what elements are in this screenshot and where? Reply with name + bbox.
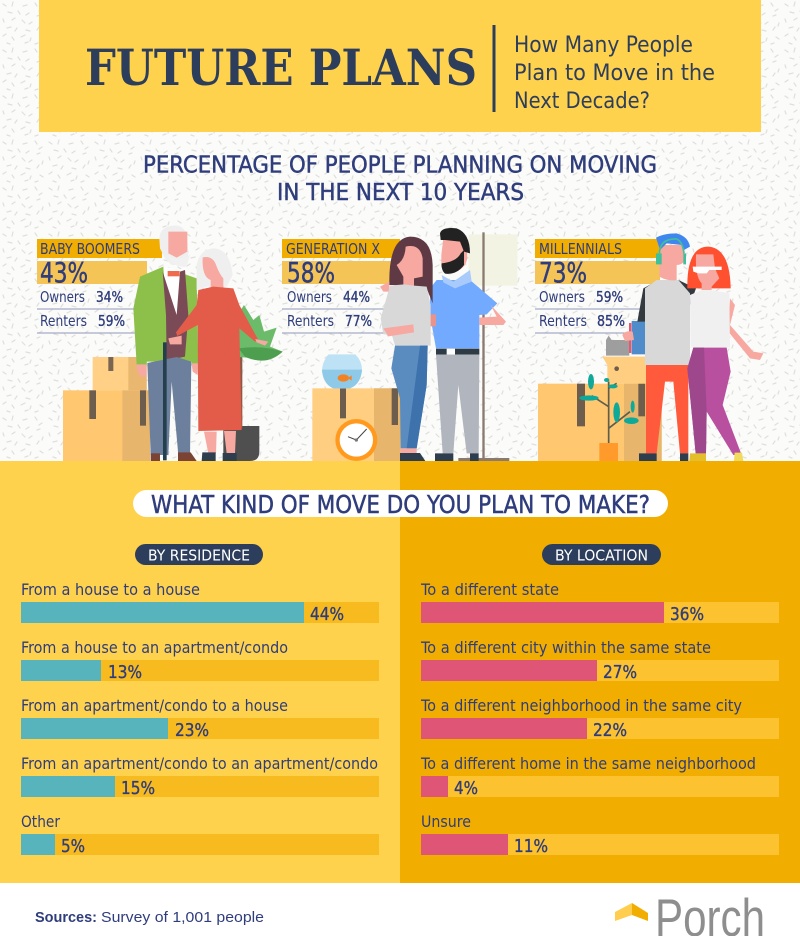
panel: millennials stats: MILLENNIALS: [539, 240, 622, 258]
logo: porch: [615, 889, 765, 936]
panel: baby boomers stats: 59%: [98, 312, 125, 330]
bar chart: by location: To a different home in the same neighborhood: [420, 754, 756, 773]
column heading: by residence: [135, 544, 263, 565]
subtitle: [492, 25, 715, 114]
panel: millennials stats: Renters: [539, 312, 587, 330]
panel: baby boomers stats: BABY BOOMERS: [40, 240, 140, 258]
panel: millennials stats: [535, 239, 660, 334]
bar chart: by residence: 13%: [108, 662, 142, 683]
panel: generation x stats: GENERATION X: [286, 240, 380, 258]
panel: by residence background: [0, 461, 400, 883]
panel: generation x stats: Owners: [287, 288, 332, 306]
bar chart: by location: 22%: [593, 720, 627, 741]
footer sources: Survey of 1,001 people: [101, 909, 264, 926]
bar chart: by residence: From a house to an apartment/condo: [21, 638, 288, 657]
subtitle: Next Decade?: [514, 89, 650, 114]
panel: baby boomers stats: Renters: [40, 312, 87, 330]
bar chart: by location: [420, 580, 779, 857]
panel: generation x stats: 44%: [343, 288, 370, 306]
panel: millennials stats: 59%: [596, 288, 623, 306]
panel: generation x stats: [282, 239, 400, 334]
column heading: by location: BY LOCATION: [555, 546, 648, 564]
footer sources: [35, 909, 264, 926]
bar chart: by residence: 5%: [61, 836, 85, 857]
panel: generation x stats: 77%: [345, 312, 372, 330]
bar chart: by location: To a different neighborhood in the same city: [420, 696, 742, 715]
bar chart: by residence: From an apartment/condo to an apartment/condo: [21, 754, 378, 773]
section heading: percentage planning on moving: [143, 150, 657, 206]
panel: baby boomers stats: Owners: [40, 288, 85, 306]
title: FUTURE PLANS: [85, 38, 477, 97]
column heading: by residence: BY RESIDENCE: [148, 546, 250, 564]
bar chart: by location: 11%: [514, 836, 548, 857]
footer sources: Sources:: [35, 909, 97, 926]
bar chart: by location: 4%: [454, 778, 478, 799]
patterned background: [0, 0, 800, 461]
panel: generation x stats: 58%: [287, 256, 335, 289]
section heading: percentage planning on moving: PERCENTAGE OF PEOPLE PLANNING ON MOVING: [143, 150, 657, 178]
panel: millennials stats: 85%: [597, 312, 625, 330]
subtitle: Plan to Move in the: [514, 61, 715, 86]
subtitle: How Many People: [514, 33, 693, 58]
panel: baby boomers stats: [37, 239, 162, 334]
bar chart: by residence: 23%: [175, 720, 209, 741]
bar chart: by residence: [21, 580, 379, 857]
panel: millennials stats: 73%: [539, 256, 587, 289]
bar chart: by residence: Other: [21, 812, 60, 831]
bar chart: by residence: From an apartment/condo to a house: [21, 696, 288, 715]
panel: generation x stats: Renters: [287, 312, 334, 330]
column heading: by location: [542, 544, 661, 565]
illustration: generation x couple, box, fishbowl and clock: [312, 228, 517, 461]
panel: baby boomers stats: 43%: [40, 256, 88, 289]
bar chart: by location: To a different city within the same state: [420, 638, 711, 657]
bar chart: by residence: 44%: [310, 604, 344, 625]
illustration: baby boomers couple, boxes and plant: [63, 226, 283, 461]
panel: baby boomers stats: 34%: [96, 288, 123, 306]
bar chart: by location: To a different state: [420, 580, 559, 599]
bar chart: by residence: 15%: [121, 778, 155, 799]
bar chart: by location: 36%: [670, 604, 704, 625]
panel: millennials stats: Owners: [539, 288, 585, 306]
illustration: millennials couple, cat, boxes and plant: [538, 233, 763, 461]
bar chart: by location: Unsure: [421, 812, 471, 831]
header panel: [39, 0, 761, 132]
bar chart: by location: 27%: [603, 662, 637, 683]
panel: by location background: [400, 461, 800, 883]
section heading: percentage planning on moving: IN THE NEXT 10 YEARS: [277, 178, 524, 206]
section heading: what kind of move: WHAT KIND OF MOVE DO YOU PLAN TO MAKE?: [151, 490, 650, 519]
bar chart: by residence: From a house to a house: [21, 580, 200, 599]
